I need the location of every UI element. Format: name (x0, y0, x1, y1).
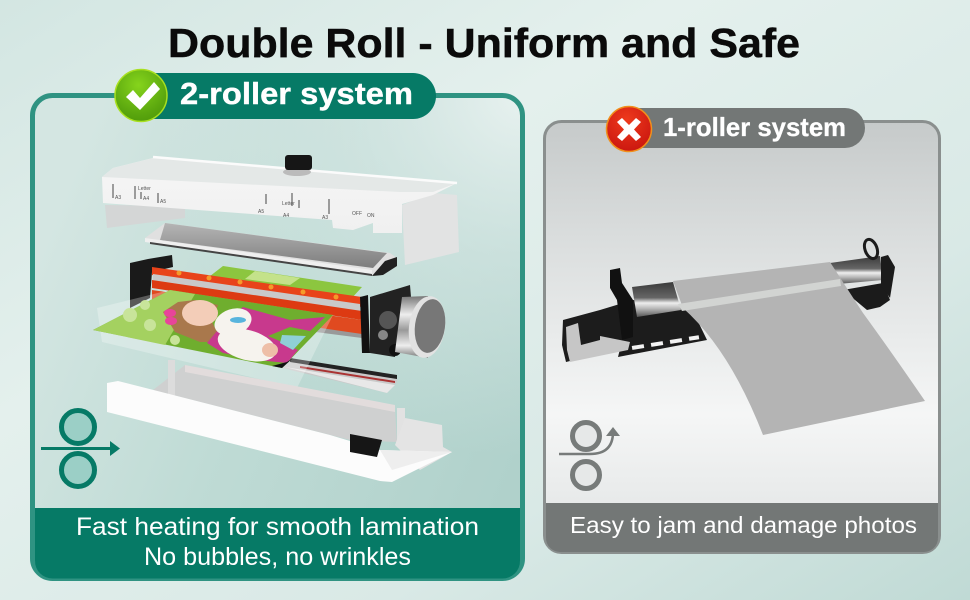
silver roller bar (678, 279, 841, 311)
shirt (207, 307, 325, 363)
footer band (35, 508, 520, 578)
right body and bracket (830, 238, 895, 310)
footer band (546, 503, 938, 552)
lower metal tray (282, 357, 397, 393)
badge: 1-roller system (606, 106, 865, 152)
paper size marks (113, 184, 375, 221)
paper size marks: A5 (160, 199, 166, 205)
panel: 2-roller system (32, 70, 522, 578)
laminator exploded view (93, 155, 459, 482)
paper size marks: Letter (138, 186, 151, 192)
icon: rollers with curled arrow (559, 422, 620, 488)
paper size marks: A4 (283, 213, 289, 219)
hand (262, 343, 278, 357)
paper size marks: A4 (143, 196, 149, 202)
paper size marks: A3 (115, 195, 121, 201)
footer band: Easy to jam and damage photos (570, 512, 917, 538)
right roller bracket and gears (360, 285, 411, 357)
silver end clip (566, 323, 630, 362)
base tray (107, 360, 452, 482)
heating rollers (152, 267, 362, 338)
footer text: Fast heating for smooth lamination (76, 513, 479, 541)
badge: 2-roller system (115, 70, 436, 122)
hair (163, 300, 222, 342)
icon: two rollers with straight arrow (41, 410, 120, 486)
icon: red cross (606, 106, 652, 152)
face (182, 300, 218, 326)
left roller bracket (130, 255, 173, 308)
paper size marks: ON (367, 213, 375, 219)
title: Double Roll - Uniform and Safe (168, 20, 800, 66)
rabbit (214, 323, 280, 367)
lid (102, 155, 459, 265)
paper size marks: A5 (258, 209, 264, 215)
back photo sheet (205, 266, 362, 300)
front photo of girl (93, 290, 333, 368)
upper metal tray (145, 223, 397, 276)
footer text (76, 513, 479, 571)
striped card (280, 335, 306, 350)
hair bows (164, 309, 176, 317)
laminating pouch (97, 290, 333, 388)
left drum (632, 282, 681, 317)
black chassis (562, 300, 707, 362)
badge: 1-roller system: 1-roller system (663, 112, 846, 142)
single roller assembly (562, 238, 925, 435)
paper size marks: Letter (282, 201, 295, 207)
paper size marks: A3 (322, 215, 328, 221)
badge: 2-roller system: 2-roller system (180, 76, 413, 111)
power switch (350, 434, 382, 457)
chassis slots (632, 335, 699, 350)
slider knob (283, 155, 312, 176)
footer text: No bubbles, no wrinkles (144, 543, 411, 571)
grey paper sheet (673, 262, 925, 435)
motor cylinder (395, 294, 449, 360)
panel: 1-roller system (544, 106, 940, 552)
paper size marks: OFF (352, 211, 362, 217)
left arm (610, 268, 633, 340)
icon: green check (115, 70, 167, 122)
